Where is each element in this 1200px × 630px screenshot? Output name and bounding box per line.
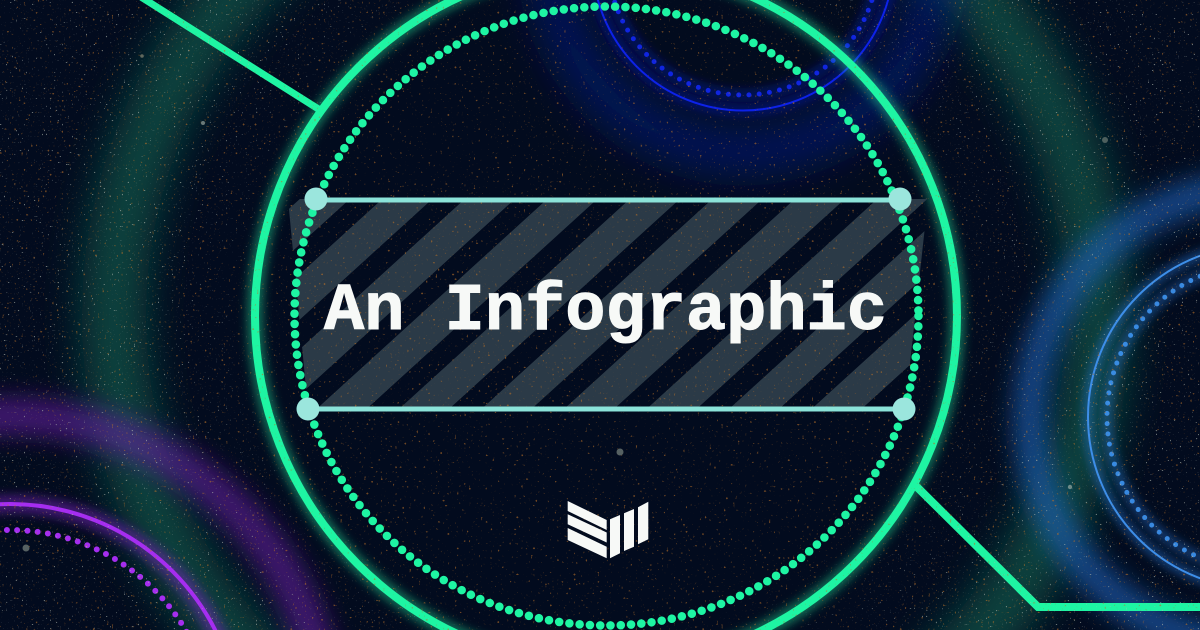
node: top right: [888, 188, 912, 210]
connector line: bottom right: [915, 485, 1200, 607]
purple circle bottom-left: [0, 504, 240, 630]
title: An Infographic: [324, 274, 887, 350]
node: bottom right: [892, 398, 916, 420]
blue circle top: [592, 0, 894, 110]
icon: logo: [568, 501, 648, 558]
dotted green circle: [294, 6, 918, 626]
glow ring: blue right: [1030, 187, 1200, 630]
striped title band: [288, 199, 928, 409]
glow ring: blue top: [551, 0, 935, 152]
connector line: top left: [141, 0, 320, 110]
blue circle right: [1088, 245, 1200, 589]
node: top left: [304, 188, 328, 210]
main green circle: [255, 0, 957, 630]
band top line: [316, 198, 900, 202]
band bottom line: [308, 406, 904, 412]
node: bottom left: [296, 398, 320, 420]
glow ring: purple: [0, 416, 328, 630]
